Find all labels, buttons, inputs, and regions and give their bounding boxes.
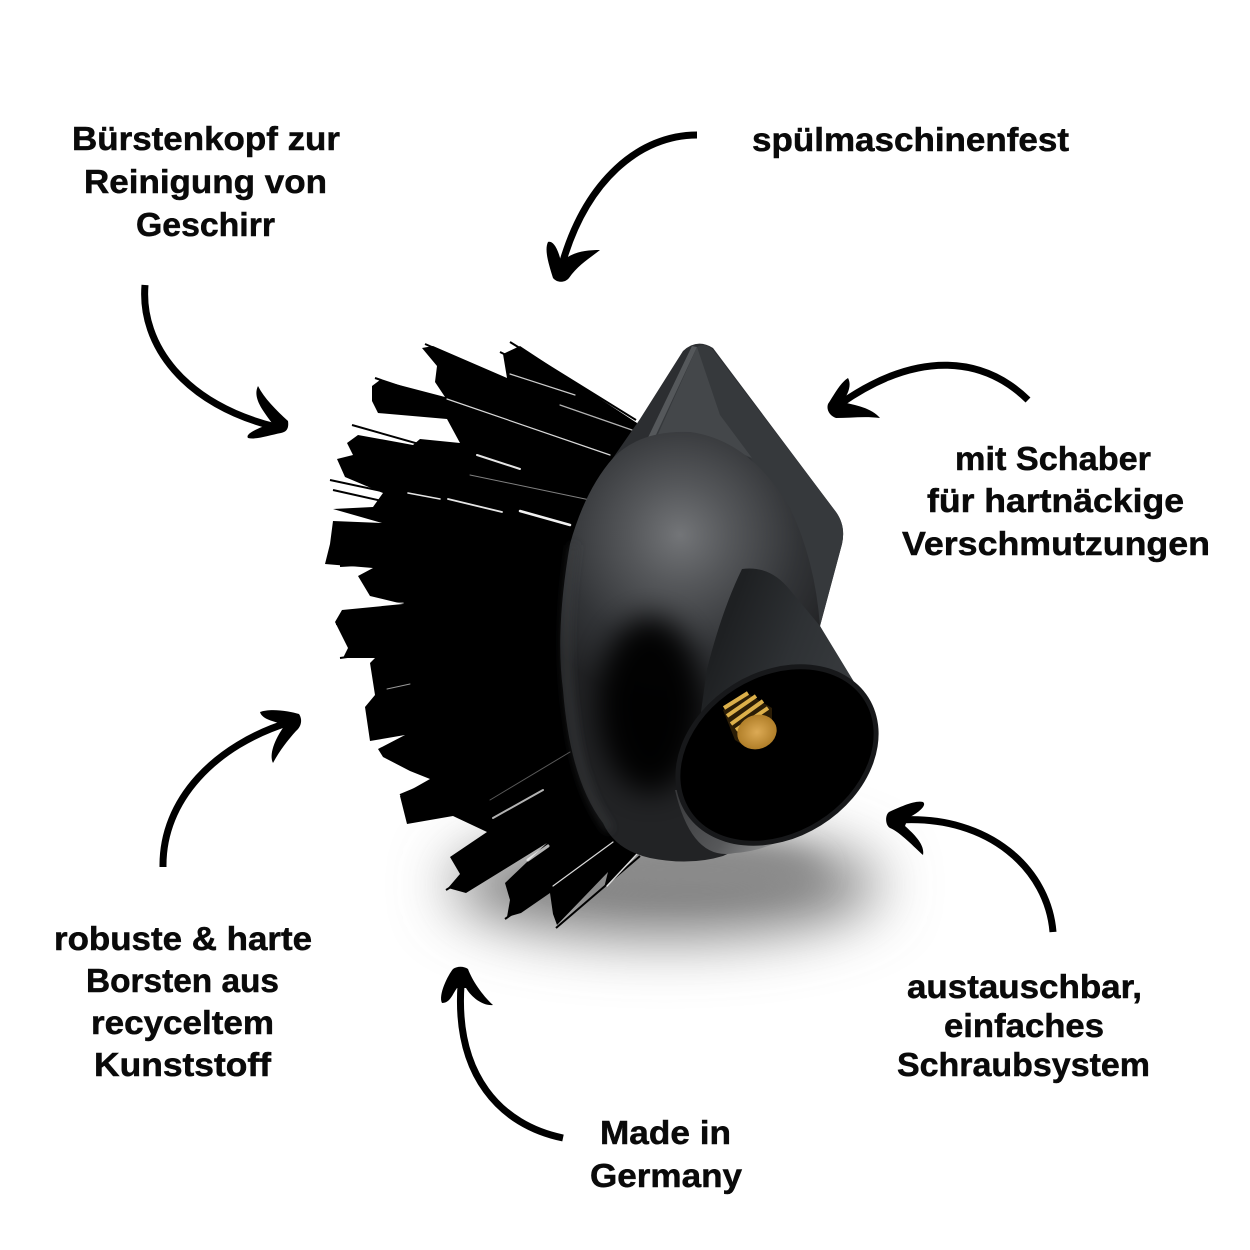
product photo: brush head <box>325 342 913 928</box>
text: scraper: Verschmutzungen <box>902 525 1210 562</box>
text: bristles: Kunststoff <box>94 1046 272 1083</box>
dome body <box>560 432 860 862</box>
text: brush head: Bürstenkopf zur <box>72 120 340 157</box>
text: bristles: recyceltem <box>91 1004 274 1041</box>
bristle highlights <box>370 374 637 886</box>
text: bristles <box>54 920 312 1083</box>
arrow: brush head label <box>145 285 288 438</box>
text: scraper: mit Schaber <box>955 440 1151 477</box>
text: brush head <box>72 120 340 243</box>
text: made in Germany: Germany <box>590 1157 743 1194</box>
floor shadow <box>450 833 880 937</box>
text: made in Germany <box>590 1114 743 1194</box>
scraper plate <box>613 344 843 626</box>
text: replaceable screw system: Schraubsystem <box>897 1046 1150 1083</box>
nozzle opening <box>641 627 913 883</box>
text: replaceable screw system: austauschbar, <box>907 968 1142 1005</box>
text: bristles: Borsten aus <box>86 962 279 999</box>
text: dishwasher safe: spülmaschinenfest <box>752 121 1069 158</box>
bristles <box>325 342 660 928</box>
text: made in Germany: Made in <box>600 1114 731 1151</box>
text: bristles: robuste & harte <box>54 920 312 957</box>
text: replaceable screw system: einfaches <box>944 1007 1104 1044</box>
text: brush head: Reinigung von <box>84 163 327 200</box>
arrow: made in Germany label <box>441 967 563 1138</box>
text: scraper <box>902 440 1210 562</box>
arrow: bristles label <box>163 710 301 867</box>
arrow: scraper label <box>827 365 1028 418</box>
arrow: dishwasher label <box>547 135 697 282</box>
text: replaceable screw system <box>897 968 1150 1083</box>
brass screw <box>723 693 782 755</box>
arrow: screw system label <box>886 802 1053 932</box>
text: scraper: für hartnäckige <box>927 482 1184 519</box>
nozzle <box>675 568 862 854</box>
text: brush head: Geschirr <box>136 206 275 243</box>
